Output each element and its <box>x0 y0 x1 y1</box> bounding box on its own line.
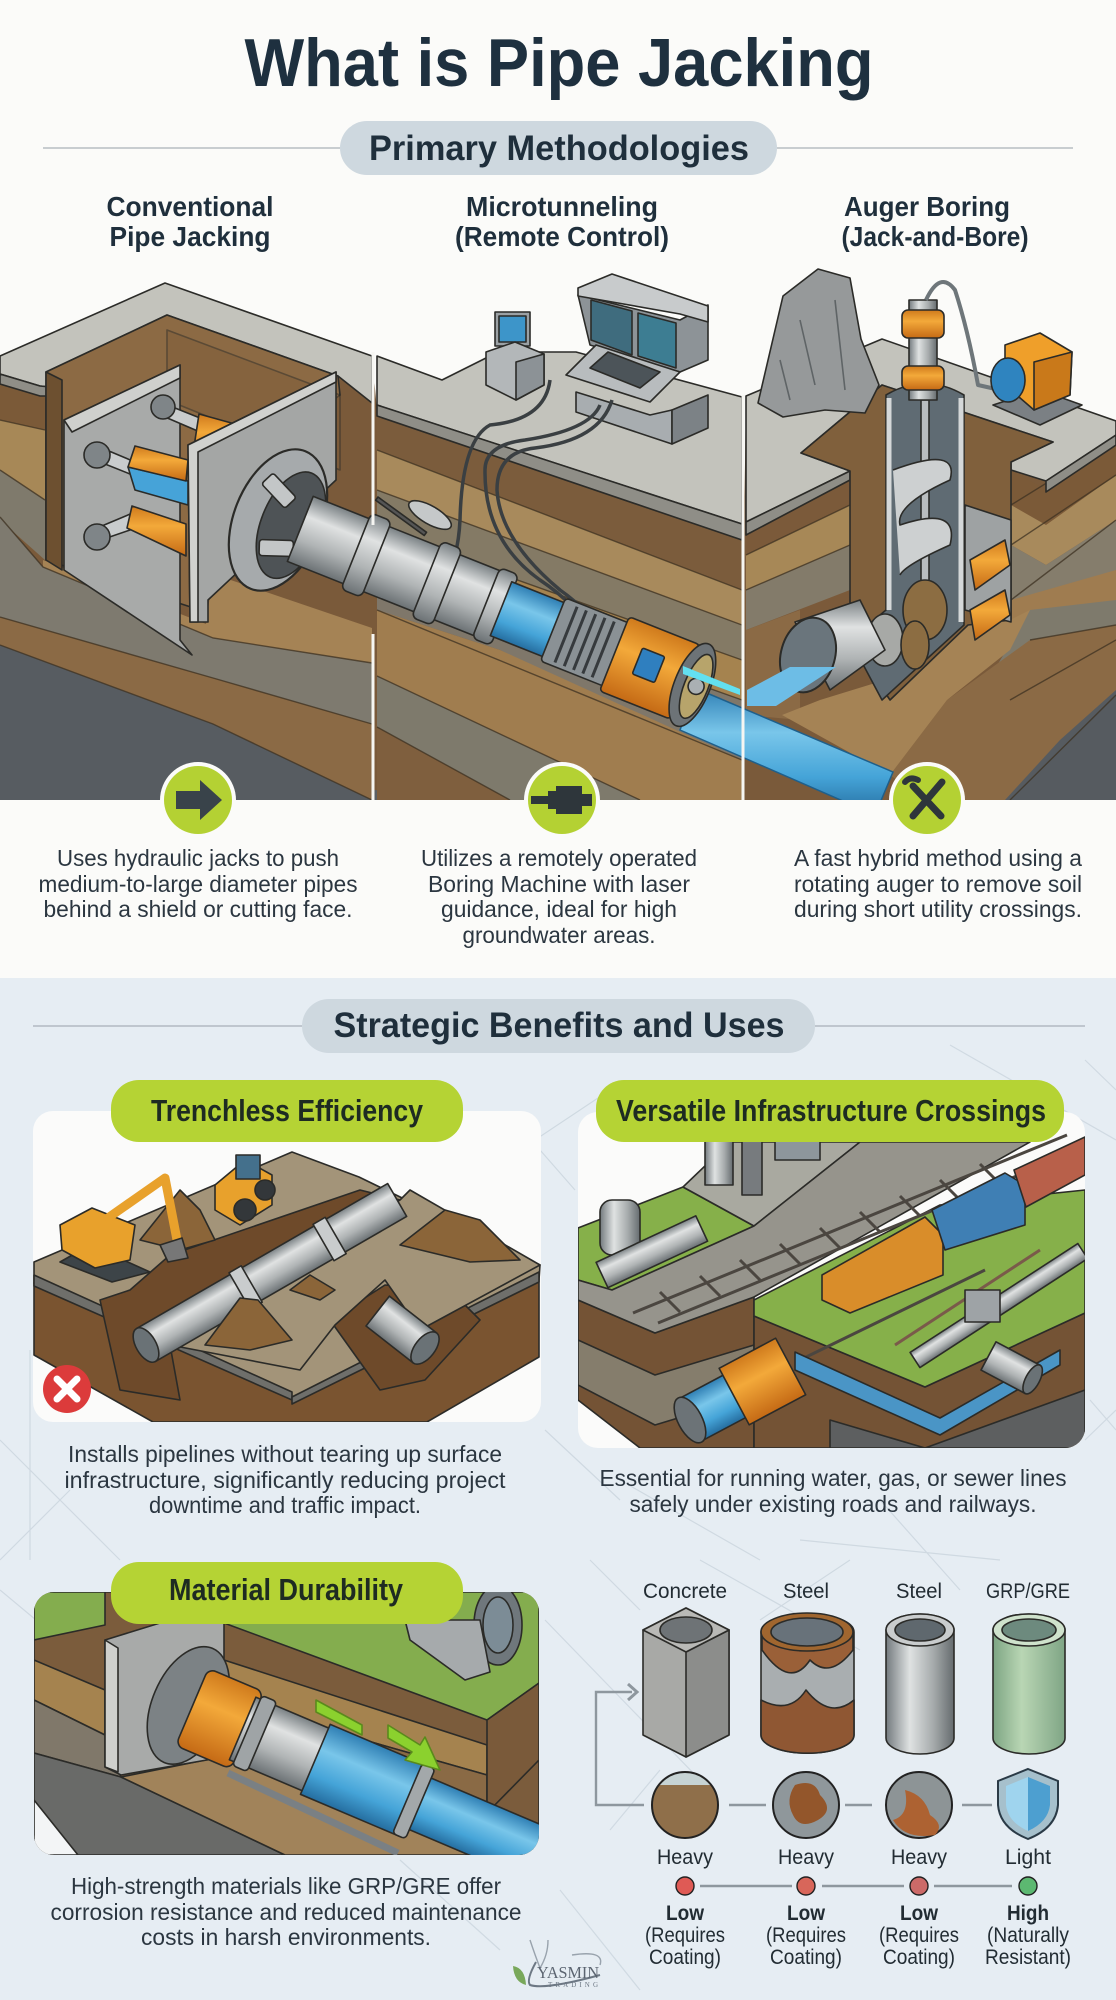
resistance labels: Low <box>666 1902 705 1925</box>
laser beam <box>683 666 740 695</box>
icon: arrow <box>160 762 236 838</box>
swatch: steel corrosion <box>773 1772 839 1838</box>
thrust wall <box>188 372 336 622</box>
control cables <box>455 380 614 602</box>
weight labels: Light <box>1005 1846 1051 1869</box>
remote monitor unit <box>486 312 544 400</box>
concrete slab: middle <box>377 352 742 540</box>
cutting ring <box>228 448 328 592</box>
icon: wrench and screwdriver <box>889 762 965 838</box>
resistance labels: Low <box>900 1902 939 1925</box>
description: trenchless efficiency: downtime and traffic impact. <box>149 1492 421 1518</box>
flow arrows <box>316 1700 440 1770</box>
description: auger boring <box>794 845 1082 922</box>
resistance labels: Resistant) <box>985 1946 1071 1969</box>
description: conventional: behind a shield or cutting face. <box>44 896 352 922</box>
boulder <box>758 269 879 417</box>
hydraulic jack: top <box>150 394 232 441</box>
heading: strategic benefits <box>33 999 1085 1053</box>
heading: primary methodologies: Primary Methodologies <box>369 129 749 168</box>
description: auger boring: rotating auger to remove soil <box>794 871 1082 897</box>
corrosion resistance scale <box>676 1877 1037 1895</box>
train <box>822 1137 1085 1313</box>
description: microtunneling: guidance, ideal for high <box>441 896 677 922</box>
connector with arrow <box>596 1684 992 1805</box>
plant yard <box>683 1142 860 1226</box>
description: microtunneling: Boring Machine with laser <box>428 871 690 897</box>
auger pit <box>801 384 1053 700</box>
logo: Yasmin Trading: TRADING <box>548 1981 598 1989</box>
description: trenchless efficiency <box>64 1441 506 1518</box>
description: material durability <box>50 1873 522 1950</box>
tanks and pipe <box>596 1115 820 1288</box>
rails <box>633 1135 1085 1323</box>
heading: primary methodologies <box>43 121 1073 175</box>
logo: Yasmin Trading <box>513 1940 601 1989</box>
jacking pit <box>46 315 340 655</box>
support flange <box>405 1585 522 1680</box>
resistance labels: (Requires <box>879 1924 959 1947</box>
description: trenchless efficiency: infrastructure, significantly reducing project <box>64 1467 506 1493</box>
resistance labels: (Naturally <box>987 1924 1069 1947</box>
pipe through shaft <box>664 1338 1060 1454</box>
description: material durability: High-strength materials like GRP/GRE offer <box>71 1873 501 1899</box>
pipe: GRP/GRE <box>993 1614 1065 1754</box>
column heading: auger boring <box>842 191 1028 252</box>
description: conventional: medium-to-large diameter pipes <box>38 871 358 897</box>
column heading: microtunneling: (Remote Control) <box>455 221 669 252</box>
icon: shield <box>998 1769 1058 1839</box>
description: versatile crossings: safely under existing roads and railways. <box>630 1491 1036 1517</box>
title: What is Pipe Jacking <box>244 25 874 101</box>
water outflow <box>747 667 836 706</box>
illustration: durable pipe in trench <box>34 1585 566 1913</box>
pipe: concrete <box>643 1608 729 1757</box>
concrete slab: left <box>0 283 372 403</box>
hydraulic jack: middle <box>84 442 188 505</box>
resistance labels: (Requires <box>766 1924 846 1947</box>
weight labels <box>657 1846 1051 1869</box>
excavator <box>60 1178 188 1282</box>
pill: trenchless efficiency <box>111 1080 463 1142</box>
resistance labels: Coating) <box>770 1946 842 1969</box>
concrete slab: right <box>746 339 1116 535</box>
pill: material durability: Material Durability <box>169 1572 404 1607</box>
description: microtunneling: groundwater areas. <box>462 922 656 948</box>
exposed pipeline <box>127 1182 445 1369</box>
comparison table: pipe materials <box>596 1580 1071 1969</box>
green field: right <box>754 1190 1085 1387</box>
heading: strategic benefits: Strategic Benefits and Uses <box>334 1006 784 1045</box>
blue pipe section <box>490 582 567 658</box>
description: versatile crossings <box>600 1465 1066 1517</box>
power unit <box>991 333 1082 425</box>
auger casing tube <box>772 600 885 699</box>
green field: left <box>578 1187 754 1290</box>
resistance labels: High <box>1007 1902 1049 1925</box>
panel: material durability <box>34 1585 566 1913</box>
column heading: microtunneling <box>455 191 669 252</box>
illustration: road and rail crossing <box>578 1115 1088 1454</box>
product pipe: conveyed blue line <box>679 693 894 800</box>
ground strata <box>0 339 1116 800</box>
material labels: Steel <box>783 1580 829 1603</box>
resistance labels: Coating) <box>883 1946 955 1969</box>
description: material durability: costs in harsh environments. <box>141 1924 431 1950</box>
motor housing <box>540 598 631 687</box>
column heading: conventional: Pipe Jacking <box>110 221 270 252</box>
column heading: microtunneling: Microtunneling <box>466 191 658 222</box>
cable probe <box>376 495 455 536</box>
material labels: Concrete <box>643 1580 727 1603</box>
utility pipes <box>895 1244 1088 1368</box>
jacked pipe string with microtunnel machine <box>228 448 716 728</box>
description: microtunneling: Utilizes a remotely operated <box>421 845 697 871</box>
pill: material durability <box>111 1562 463 1624</box>
material labels: GRP/GRE <box>986 1580 1070 1603</box>
description: trenchless efficiency: Installs pipelines without tearing up surface <box>68 1441 502 1467</box>
soil block: right <box>754 1313 1085 1448</box>
resistance labels: (Requires <box>645 1924 725 1947</box>
description: auger boring: during short utility crossings. <box>794 896 1082 922</box>
description: versatile crossings: Essential for running water, gas, or sewer lines <box>600 1465 1066 1491</box>
panel: trenchless efficiency <box>33 1111 541 1422</box>
column heading: conventional <box>106 191 274 252</box>
column heading: auger boring: Auger Boring <box>844 191 1010 222</box>
lower section background <box>0 978 1116 2000</box>
panel dividers <box>373 352 743 800</box>
logo: Yasmin Trading: YASMIN <box>537 1963 599 1982</box>
swatch: concrete weight <box>652 1770 718 1838</box>
swatch: rust <box>886 1772 952 1838</box>
concrete pipe segments <box>285 491 520 648</box>
wheel loader <box>215 1155 275 1225</box>
column heading: conventional: Conventional <box>106 191 274 222</box>
pill: versatile crossings: Versatile Infrastructure Crossings <box>616 1093 1046 1128</box>
resistance labels <box>645 1902 1071 1969</box>
control console <box>566 274 708 444</box>
soil block: left <box>578 1297 754 1448</box>
track bed <box>578 1142 1030 1333</box>
weight labels: Heavy <box>657 1846 713 1869</box>
description: conventional <box>38 845 358 922</box>
icon: boring machine <box>524 762 600 838</box>
illustration: open-cut trench <box>34 1152 540 1422</box>
pipe rail <box>228 1773 398 1853</box>
pipe: coated steel <box>886 1614 954 1754</box>
hydraulic jack: bottom <box>84 506 186 556</box>
weight labels: Heavy <box>891 1846 947 1869</box>
resistance labels: Coating) <box>649 1946 721 1969</box>
anchor ring and pipeline <box>131 1634 566 1913</box>
illustration: pipe jacking cross-section <box>0 269 1116 815</box>
description: auger boring: A fast hybrid method using a <box>794 845 1082 871</box>
material labels: Steel <box>896 1580 942 1603</box>
description: conventional: Uses hydraulic jacks to push <box>57 845 339 871</box>
pipe: rusted steel <box>761 1613 854 1753</box>
spoil mounds <box>140 1190 520 1350</box>
pill: versatile crossings <box>596 1080 1064 1142</box>
material labels <box>643 1580 1070 1603</box>
description: material durability: corrosion resistance and reduced maintenance <box>50 1899 522 1925</box>
panel: versatile crossings <box>578 1112 1088 1454</box>
icon: red cross <box>43 1365 91 1413</box>
resistance labels: Low <box>787 1902 826 1925</box>
strata outlines <box>0 420 1116 800</box>
column heading: auger boring: (Jack-and-Bore) <box>842 221 1028 252</box>
cutter head <box>668 642 716 728</box>
pill: trenchless efficiency: Trenchless Efficiency <box>151 1093 424 1128</box>
weight labels: Heavy <box>778 1846 834 1869</box>
orange shield <box>600 617 700 719</box>
auger drive head <box>902 282 1000 400</box>
description: microtunneling <box>421 845 697 948</box>
